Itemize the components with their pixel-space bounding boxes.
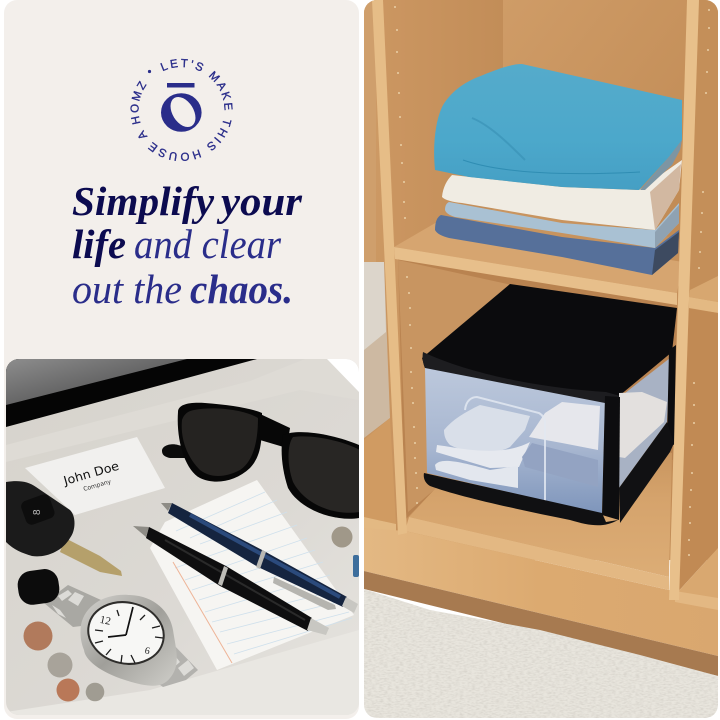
panel: cream text background	[4, 0, 359, 719]
right lens	[288, 436, 360, 513]
folded clothes	[434, 64, 682, 275]
tray corner highlight	[327, 359, 359, 392]
fob icon: 8	[32, 509, 43, 515]
case	[80, 595, 177, 686]
cubby floor	[409, 420, 672, 577]
panel: tray photo with everyday items	[6, 359, 360, 715]
headline	[72, 178, 303, 312]
strap links	[52, 590, 84, 618]
logo badge	[130, 58, 233, 161]
headline line 2: and clear	[134, 221, 282, 267]
upper right side panel	[690, 0, 718, 290]
left floor	[364, 418, 396, 524]
slogan dot	[148, 70, 151, 73]
copper coin	[56, 678, 80, 702]
coins	[24, 526, 359, 702]
dial	[87, 601, 165, 665]
outer left wood	[364, 0, 376, 262]
left lens	[182, 408, 258, 476]
key blade	[60, 538, 122, 576]
tray upper wall	[6, 359, 359, 462]
margin line	[173, 562, 232, 663]
hour marks: 12	[99, 614, 112, 628]
blue pen	[161, 503, 358, 613]
lower right side panel	[675, 308, 718, 595]
headline line 2	[72, 221, 282, 267]
headline line 1: Simplify	[72, 178, 215, 224]
navy blanket	[435, 215, 679, 275]
shelf peg holes	[394, 6, 710, 556]
headline line 3	[72, 266, 293, 312]
business card	[25, 437, 165, 515]
upper back panel	[503, 0, 687, 240]
headline line 2: life	[72, 221, 126, 267]
plinth top edge	[405, 517, 669, 590]
name text: John Doe	[61, 459, 121, 488]
white folded cloth right	[529, 402, 600, 450]
key fob	[6, 481, 74, 556]
storage box at left	[364, 262, 390, 438]
plinth	[364, 528, 718, 656]
middle shelf edge	[394, 247, 677, 305]
plastic storage drawer	[422, 284, 677, 525]
lower strap links	[176, 658, 194, 676]
headline line 1	[72, 178, 303, 224]
panel: shelf photo	[364, 0, 718, 718]
drawer side window	[619, 358, 670, 488]
side bottom frame	[619, 422, 674, 523]
right shelf	[689, 276, 718, 302]
note paper	[150, 480, 354, 670]
tray front rim	[10, 649, 294, 715]
dark gap	[6, 359, 257, 427]
drawer front window	[425, 368, 605, 514]
right upright	[669, 0, 699, 600]
blue shirt	[434, 64, 682, 190]
watch hands	[108, 607, 133, 637]
logo bar	[167, 83, 194, 88]
drawer lid	[422, 284, 677, 396]
fob button	[21, 494, 54, 524]
sunglasses	[162, 403, 360, 519]
wood floor	[364, 571, 718, 676]
headline line 1: your	[216, 178, 303, 224]
tray base	[6, 359, 359, 715]
back panel	[364, 0, 718, 560]
black pen	[133, 526, 329, 635]
white shirt	[442, 160, 682, 230]
silver coin	[86, 683, 104, 701]
silver coin	[332, 526, 352, 548]
watch ticks	[95, 610, 163, 663]
upper strap	[44, 585, 101, 627]
front bottom frame	[424, 473, 618, 525]
copper coin	[24, 622, 52, 650]
rug	[364, 589, 718, 718]
strap end	[18, 569, 60, 605]
left upright	[372, 0, 407, 535]
ruled lines	[175, 492, 352, 654]
drawer handle	[465, 397, 545, 503]
corner post	[602, 396, 620, 520]
car key	[6, 481, 122, 576]
blue folded cloth	[522, 443, 598, 487]
lower back panel	[398, 258, 677, 520]
wristwatch	[16, 567, 198, 687]
light blue shirt	[445, 202, 679, 248]
blue clip	[353, 555, 359, 577]
lower left side panel	[398, 260, 512, 512]
upper left side panel	[383, 0, 503, 250]
right frame	[667, 345, 676, 445]
lid front lip	[423, 352, 620, 405]
headline line 3: out the	[72, 266, 182, 312]
company text: Company	[83, 478, 112, 493]
middle shelf surface	[394, 222, 683, 293]
wristwatch: 6	[144, 645, 151, 657]
grey drawer above	[6, 359, 187, 405]
white towels	[435, 405, 530, 488]
headline line 3: chaos.	[190, 266, 293, 312]
lower strap	[160, 647, 198, 687]
silver coin	[48, 652, 72, 678]
side folded cloth	[619, 392, 667, 458]
logo letter o	[161, 92, 202, 132]
circular slogan: LET'S MAKE THIS HOUSE A HOMZ	[130, 58, 233, 161]
